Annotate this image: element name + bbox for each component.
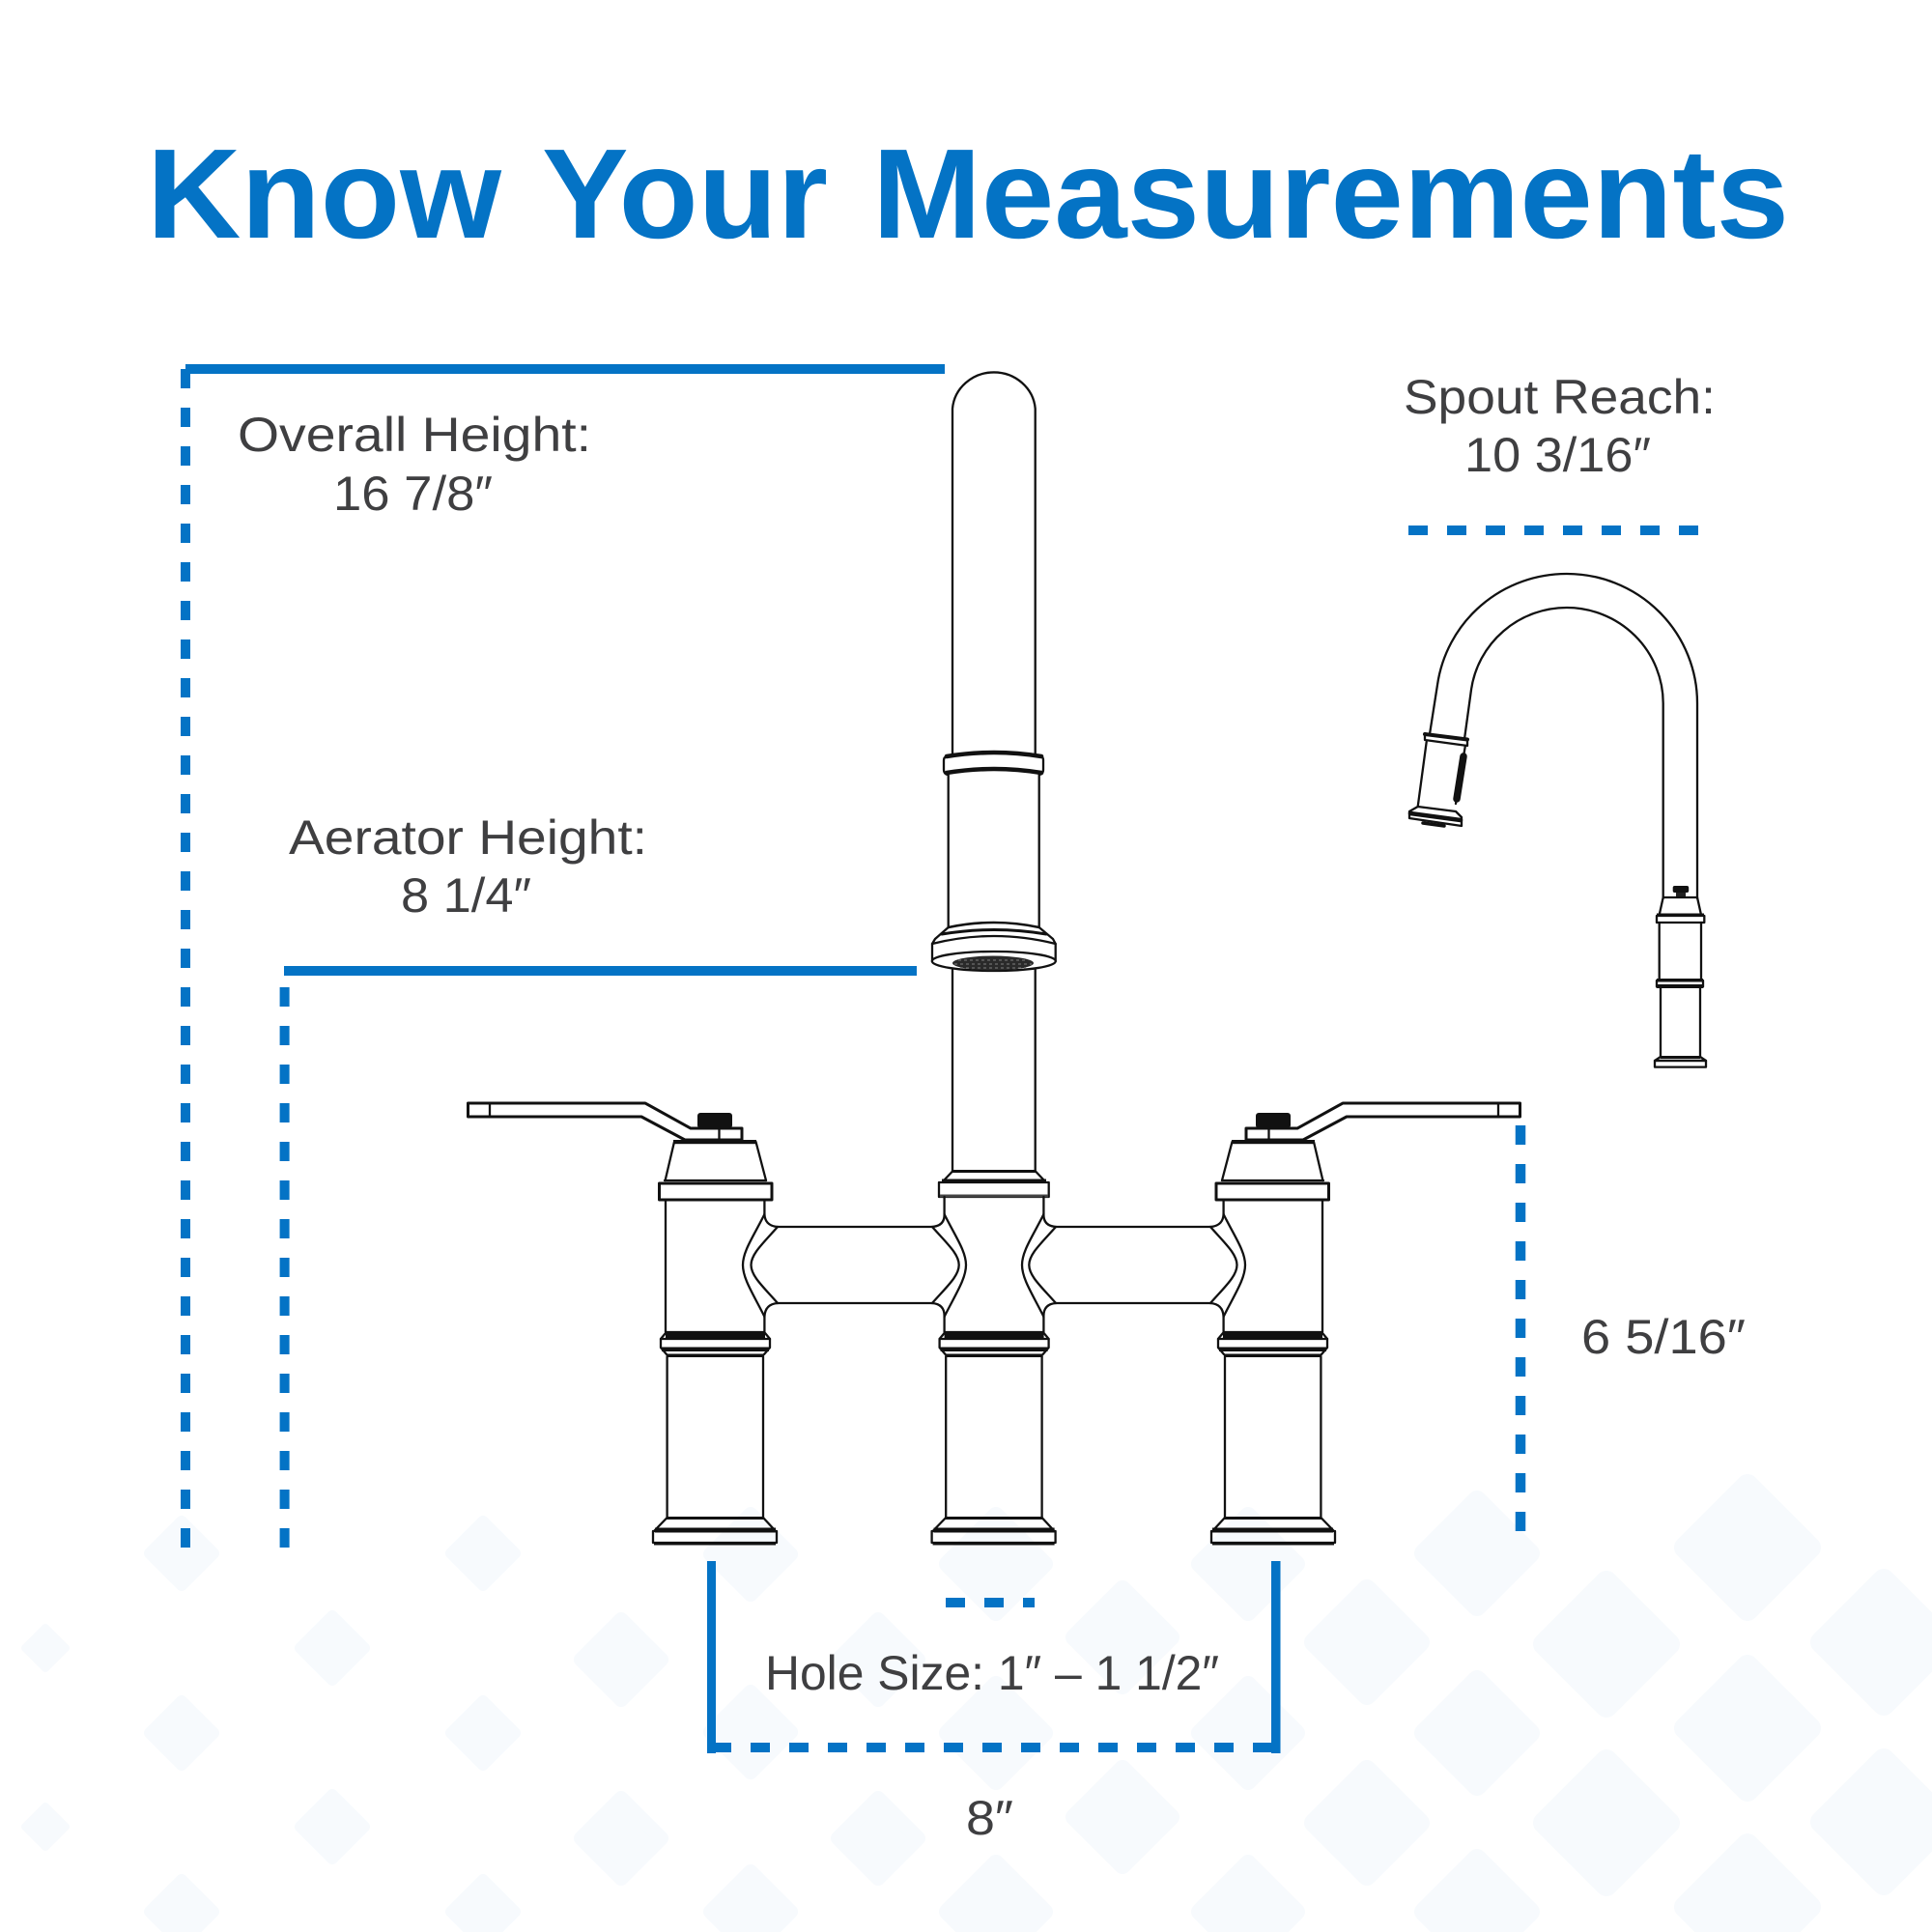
left handle and column	[468, 1103, 966, 1546]
title: Measurements	[872, 123, 1789, 265]
label: aerator height: 8 1/4″	[401, 868, 531, 923]
title	[147, 123, 1789, 265]
label: spout reach: 10 3/16″	[1464, 428, 1651, 482]
aerator height dimension line	[284, 966, 917, 1548]
label: aerator height: Aerator Height:	[289, 810, 647, 865]
label: overall height: 16 7/8″	[333, 467, 493, 521]
label: spout reach	[1404, 370, 1716, 482]
label: overall height	[238, 408, 591, 521]
deck height dashed line	[1516, 1125, 1525, 1531]
right handle and column	[1022, 1103, 1520, 1546]
title: Your	[542, 123, 828, 265]
left connector	[666, 1197, 966, 1332]
label: aerator height	[289, 810, 647, 923]
left knob	[697, 1113, 732, 1128]
background diamond pattern	[25, 1485, 1932, 1932]
label: overall height: Overall Height:	[238, 408, 591, 462]
8 inch spread bracket	[707, 1561, 1281, 1753]
spout reach dashed line	[1408, 526, 1700, 535]
label: 8 inch spread: 8″	[966, 1791, 1013, 1845]
center column	[932, 1170, 1056, 1546]
aerator head	[932, 923, 1056, 971]
label: deck height: 6 5/16″	[1581, 1310, 1746, 1364]
spout lower tube	[949, 775, 1039, 927]
side-view faucet drawing	[1409, 574, 1706, 1067]
left lever handle	[468, 1103, 742, 1140]
spout below aerator	[952, 970, 1036, 1171]
left cone and collar	[659, 1140, 772, 1200]
left ring and base	[653, 1332, 777, 1546]
label: hole size: Hole Size: 1″ – 1 1/2″	[765, 1646, 1219, 1700]
spout ring	[944, 753, 1043, 775]
center spout and aerator	[932, 372, 1056, 1171]
title: Know	[147, 123, 501, 265]
label: spout reach: Spout Reach:	[1404, 370, 1716, 424]
hole size dashed line	[946, 1598, 1035, 1607]
overall height dimension line	[185, 364, 945, 1548]
spout upper tube	[952, 372, 1036, 754]
